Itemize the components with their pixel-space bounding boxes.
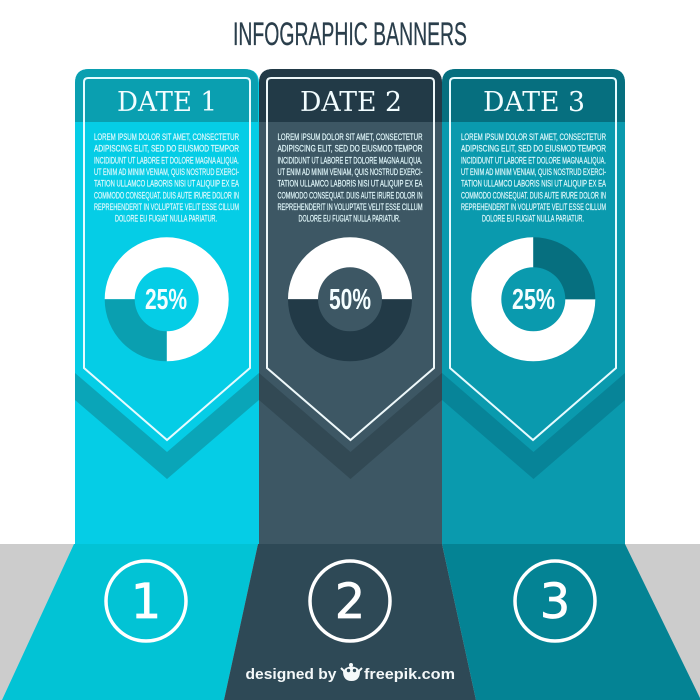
banner 1 text block: COMMODO CONSEQUAT. DUIS AUTE IRURE DOLOR IN: [94, 190, 239, 201]
banner 1 text block: ADIPISCING ELIT, SED DO EIUSMOD TEMPOR: [94, 144, 239, 155]
banner 3 body: [442, 69, 625, 544]
banner 3 heading: DATE 3: [483, 87, 585, 118]
banner 1 text block: UT ENIM AD MINIM VENIAM, QUIS NOSTRUD EXERCI-: [94, 167, 239, 178]
banner 2 header band: [259, 69, 442, 122]
banner 1 text block: INCIDIDUNT UT LABORE ET DOLORE MAGNA ALIQUA.: [94, 155, 239, 166]
banner 3 text block: UT ENIM AD MINIM VENIAM, QUIS NOSTRUD EXERCI-: [461, 167, 606, 178]
banner 3 text block: DOLORE EU FUGIAT NULLA PARIATUR.: [482, 214, 584, 225]
banner 1 header band: [75, 69, 258, 122]
banner 1 text block: DOLORE EU FUGIAT NULLA PARIATUR.: [115, 214, 217, 225]
banner 1 donut chart 25%: 25%: [145, 284, 187, 316]
banner 3 text block: LOREM IPSUM DOLOR SIT AMET, CONSECTETUR: [461, 132, 606, 143]
banner 3 donut chart 25%: [471, 237, 595, 361]
banner 2 text block: TATION ULLAMCO LABORIS NISI UT ALIQUIP EX EA: [278, 179, 423, 190]
icon: freepik mascot: [341, 663, 362, 681]
banner 3 white outline: [450, 78, 616, 440]
banner 2 white outline: [267, 78, 434, 440]
banner 1 heading: DATE 1: [117, 87, 217, 118]
banner 2 heading: DATE 2: [300, 87, 402, 118]
banner 1 white outline: [84, 78, 250, 440]
banner 1 body: [75, 69, 259, 544]
banner 3 chevron: [442, 373, 625, 479]
floor panel 3: 3: [540, 574, 570, 630]
banner 2 donut chart 50%: 50%: [329, 284, 371, 316]
banner 1 chevron: [75, 373, 259, 479]
credit line: designed by: [246, 666, 337, 683]
banner 2 chevron: [259, 373, 442, 479]
banner 2 text block: INCIDIDUNT UT LABORE ET DOLORE MAGNA ALIQUA.: [278, 155, 422, 166]
banner 2 text block: ADIPISCING ELIT, SED DO EIUSMOD TEMPOR: [278, 144, 423, 155]
banner 1 text block: TATION ULLAMCO LABORIS NISI UT ALIQUIP EX EA: [94, 179, 239, 190]
panel: banner 3: [442, 69, 625, 544]
banner 2 text block: DOLORE EU FUGIAT NULLA PARIATUR.: [298, 214, 400, 225]
title: INFOGRAPHIC BANNERS: [233, 16, 467, 52]
floor panel 3: [442, 544, 700, 700]
banner 2 body: [259, 69, 442, 544]
banner 2 text block: REPREHENDERIT IN VOLUPTATE VELIT ESSE CILLUM: [278, 202, 422, 213]
banner 1 donut chart 25%: [105, 237, 229, 361]
banner 3 donut chart 25%: 25%: [512, 284, 555, 316]
banner 3 header band: [442, 69, 625, 122]
floor panel 1: [2, 544, 258, 700]
banner 1 text block: LOREM IPSUM DOLOR SIT AMET, CONSECTETUR: [94, 132, 239, 143]
banner 3 text block: ADIPISCING ELIT, SED DO EIUSMOD TEMPOR: [461, 144, 606, 155]
banner 2 text block: UT ENIM AD MINIM VENIAM, QUIS NOSTRUD EXERCI-: [278, 167, 422, 178]
credit line: [246, 663, 455, 683]
banner 2 text block: COMMODO CONSEQUAT. DUIS AUTE IRURE DOLOR IN: [278, 190, 423, 201]
banner 1 text block: [94, 132, 239, 225]
floor panel 2: [224, 544, 476, 700]
banner 3 text block: TATION ULLAMCO LABORIS NISI UT ALIQUIP EX EA: [461, 179, 606, 190]
banner 3 text block: [461, 132, 606, 225]
credit line: freepik.com: [364, 666, 455, 683]
banner 2 text block: LOREM IPSUM DOLOR SIT AMET, CONSECTETUR: [278, 132, 423, 143]
background floor: [0, 544, 700, 700]
banner 2 donut chart 50%: [288, 237, 412, 361]
floor panel 2: 2: [335, 574, 365, 630]
panel: banner 2: [259, 69, 442, 544]
banner 2 text block: [278, 132, 423, 225]
floor panel 1: 1: [131, 574, 161, 630]
panel: banner 1: [75, 69, 259, 544]
banner 1 text block: REPREHENDERIT IN VOLUPTATE VELIT ESSE CILLUM: [94, 202, 239, 213]
